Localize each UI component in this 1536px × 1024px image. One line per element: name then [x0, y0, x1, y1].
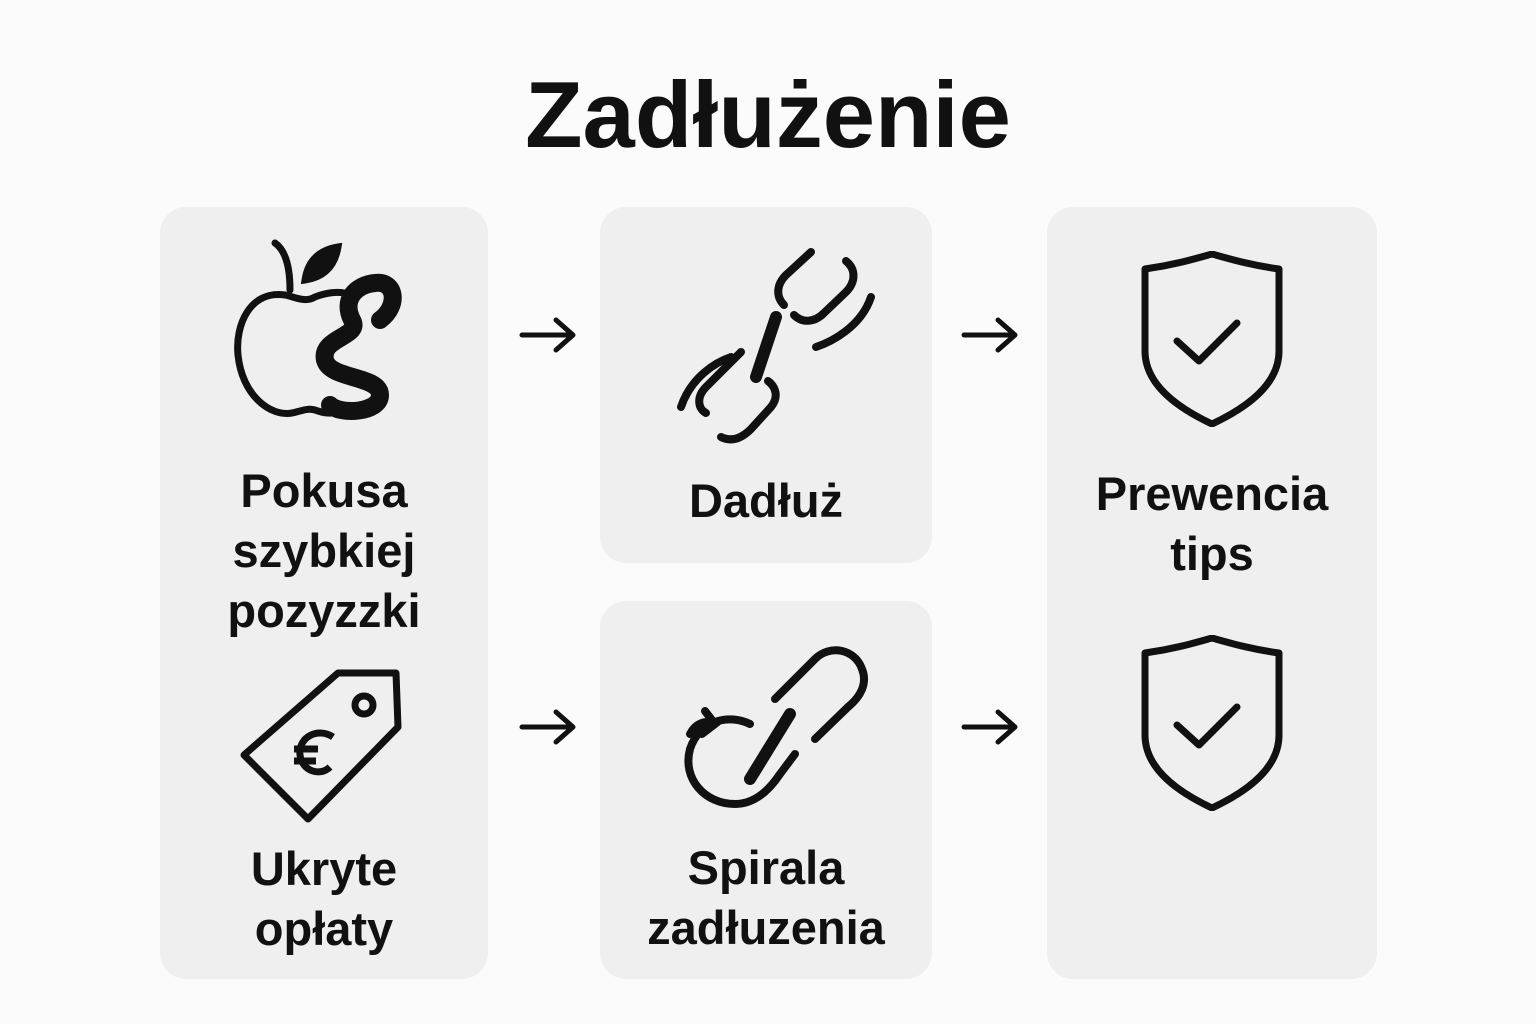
arrow: bottom left	[520, 710, 576, 744]
arrow: top right	[962, 318, 1018, 352]
panel: causes	[160, 207, 488, 979]
text: Pokusa szybkiej pozyzzki: Pokusa	[240, 464, 408, 517]
icon: price tag euro	[240, 670, 402, 822]
panel: debt	[600, 207, 932, 563]
title: Zadłużenie	[525, 62, 1011, 167]
icon: broken chain	[677, 248, 875, 444]
panel: prevention	[1047, 207, 1377, 979]
text: Pokusa szybkiej pozyzzki	[227, 464, 421, 637]
text: Spirala zadłuzenia: Spirala	[688, 841, 844, 894]
text: Ukryte opłaty: Ukryte	[251, 842, 397, 895]
panel: debt spiral	[600, 601, 932, 979]
text: Ukryte opłaty: opłaty	[255, 902, 393, 955]
text: Pokusa szybkiej pozyzzki: pozyzzki	[227, 584, 421, 637]
arrow: top left	[520, 318, 576, 352]
text: Prewencia tips	[1096, 467, 1329, 580]
icon: chain spiral	[684, 646, 868, 808]
icon: shield bottom	[1142, 635, 1282, 811]
icon: shield top	[1142, 251, 1282, 427]
arrow: bottom right	[962, 710, 1018, 744]
text: Spirala zadłuzenia	[647, 841, 886, 954]
text: Ukryte opłaty	[251, 842, 397, 955]
text: Spirala zadłuzenia: zadłuzenia	[647, 901, 885, 954]
text: Prewencia tips: Prewencia	[1096, 467, 1328, 520]
icon: apple and snake	[234, 240, 402, 420]
text: Pokusa szybkiej pozyzzki: szybkiej	[233, 524, 415, 577]
text: Prewencia tips: tips	[1170, 527, 1254, 580]
text: Dadłuż: Dadłuż	[689, 474, 843, 527]
